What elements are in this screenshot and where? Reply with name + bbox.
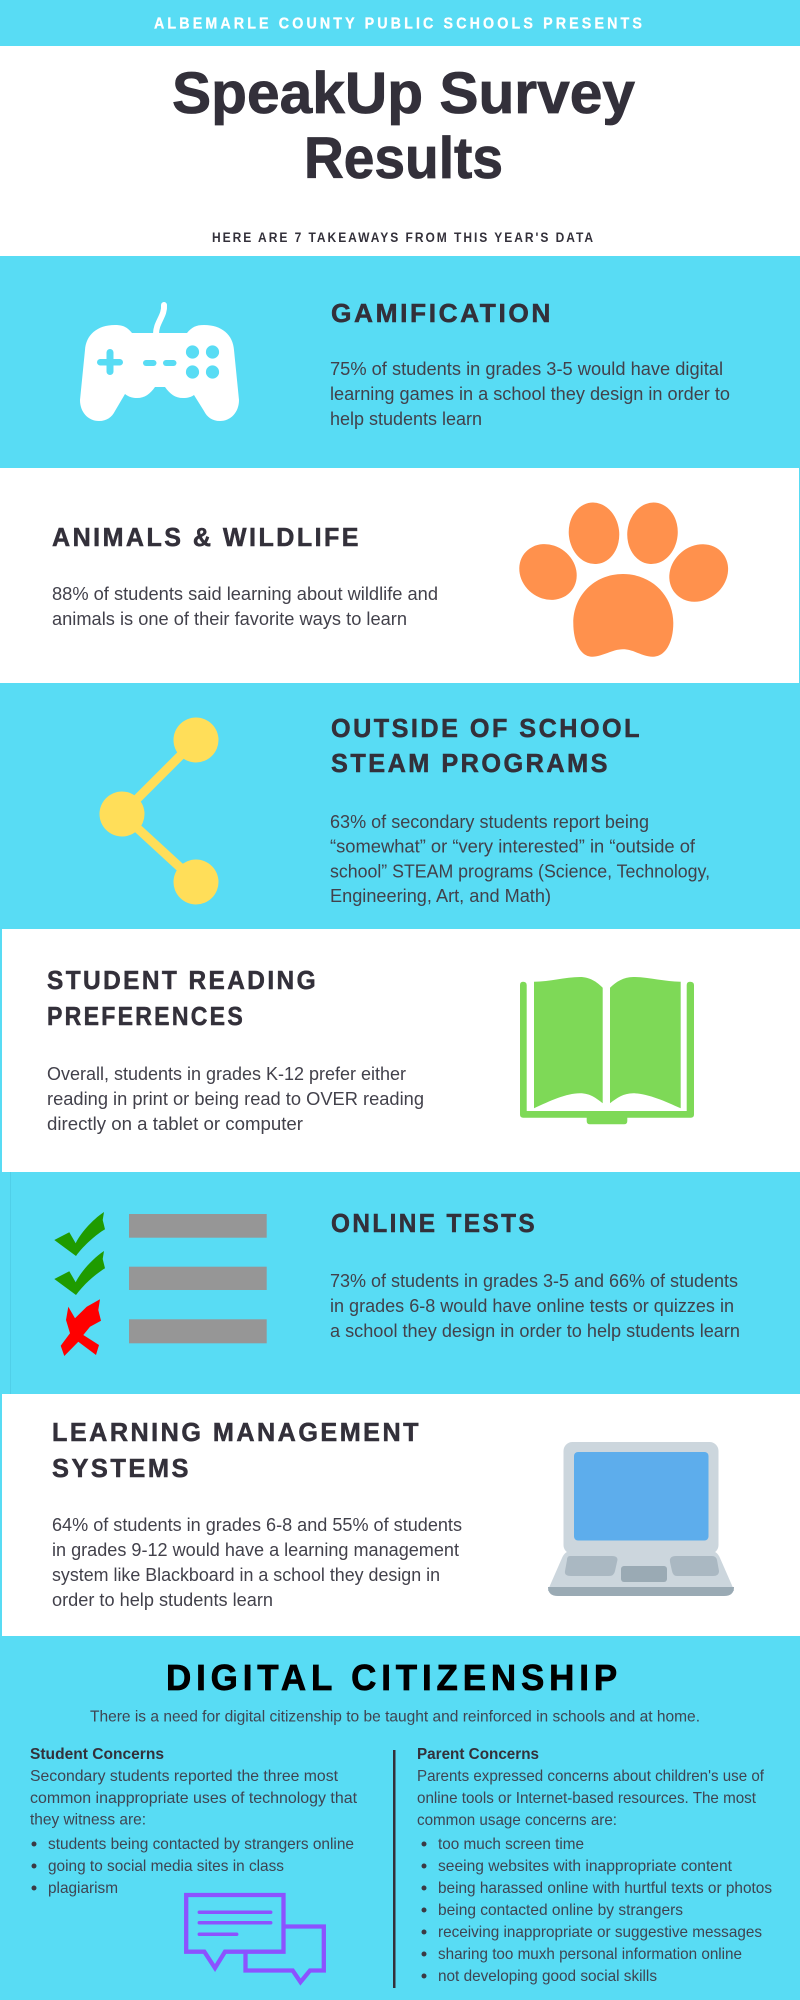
column: parent concerns: sharing too muxh personal information online	[438, 1946, 742, 1963]
column: parent concerns: Parent Concerns	[417, 1746, 539, 1763]
text: gamification body: learning games in a school they design in order to	[330, 384, 730, 404]
heading: LMS: SYSTEMS	[52, 1455, 191, 1483]
column: student concerns	[30, 1746, 358, 1897]
text: reading body: directly on a tablet or computer	[47, 1114, 303, 1134]
icon: laptop	[548, 1442, 734, 1596]
column: parent concerns: receiving inappropriate or suggestive messages	[438, 1924, 762, 1941]
panel: student reading preferences	[0, 929, 800, 1172]
icon: paw print	[508, 500, 740, 657]
column: student concerns: they witness are:	[30, 1812, 146, 1828]
column: student concerns: common inappropriate uses of technology that	[30, 1790, 358, 1807]
heading: gamification: GAMIFICATION	[331, 300, 553, 328]
heading: LMS: LEARNING MANAGEMENT	[52, 1419, 421, 1447]
column: parent concerns: being contacted online by strangers	[438, 1902, 683, 1919]
text: online tests body: 73% of students in grades 3-5 and 66% of students	[330, 1271, 738, 1291]
heading: reading: PREFERENCES	[47, 1003, 245, 1031]
heading: LMS	[52, 1419, 421, 1483]
icon: chat bubbles	[186, 1895, 324, 1982]
column: parent concerns: being harassed online with hurtful texts or photos	[438, 1880, 772, 1897]
title: SpeakUp Survey	[172, 61, 635, 126]
column: student concerns: Secondary students reported the three most	[30, 1768, 339, 1785]
text: LMS body: in grades 9-12 would have a learning management	[52, 1540, 459, 1560]
icon: share nodes	[100, 718, 218, 904]
text: reading body: Overall, students in grades K-12 prefer either	[47, 1064, 406, 1084]
title: Results	[304, 126, 503, 191]
heading: animals: ANIMALS & WILDLIFE	[52, 524, 361, 552]
text: intro sentence: There is a need for digital citizenship to be taught and reinforced in schools and at home.	[90, 1708, 700, 1726]
text: online tests body	[330, 1271, 740, 1341]
text: animals body: animals is one of their favorite ways to learn	[52, 609, 407, 629]
heading: digital citizenship: DIGITAL CITIZENSHIP	[166, 1657, 622, 1698]
column: student concerns: plagiarism	[48, 1880, 118, 1897]
text: LMS body: order to help students learn	[52, 1590, 273, 1610]
icon: checklist	[54, 1212, 267, 1356]
column: parent concerns: Parents expressed concerns about children's use of	[417, 1768, 765, 1785]
text: STEAM body: school” STEAM programs (Science, Technology,	[330, 862, 710, 882]
text: STEAM body: 63% of secondary students report being	[330, 812, 649, 832]
column: student concerns: going to social media sites in class	[48, 1858, 284, 1875]
column: parent concerns: not developing good social skills	[438, 1968, 657, 1985]
text: gamification body: help students learn	[330, 409, 482, 429]
text: LMS body: system like Blackboard in a school they design in	[52, 1565, 440, 1585]
text: STEAM body: Engineering, Art, and Math)	[330, 886, 551, 906]
text: gamification body	[330, 359, 730, 429]
heading: outside of school: OUTSIDE OF SCHOOL	[331, 715, 642, 743]
title	[172, 61, 635, 191]
text: animals body	[52, 584, 438, 629]
column: parent concerns: common usage concerns are:	[417, 1812, 617, 1829]
header band	[0, 0, 800, 46]
text: reading body: reading in print or being read to OVER reading	[47, 1089, 424, 1109]
heading: outside of school	[331, 715, 642, 778]
icon: game controller	[80, 305, 239, 421]
text: online tests body: a school they design in order to help students learn	[330, 1321, 740, 1341]
column: parent concerns	[417, 1746, 772, 1985]
icon: open book	[520, 977, 694, 1124]
text: online tests body: in grades 6-8 would have online tests or quizzes in	[330, 1296, 734, 1316]
heading: online tests: ONLINE TESTS	[331, 1210, 537, 1238]
text: STEAM body	[330, 812, 710, 906]
heading: outside of school: STEAM PROGRAMS	[331, 750, 610, 778]
column: student concerns: Student Concerns	[30, 1746, 164, 1763]
panel: gamification	[0, 256, 800, 468]
panel: digital citizenship	[0, 1636, 800, 2000]
heading: reading	[47, 967, 318, 1031]
panel: outside of school STEAM	[0, 683, 800, 929]
column: parent concerns: online tools or Internet-based resources. The most	[417, 1790, 757, 1807]
column: student concerns: students being contacted by strangers online	[48, 1836, 354, 1853]
panel: animals and wildlife	[0, 468, 800, 683]
text: STEAM body: “somewhat” or “very interested” in “outside of	[330, 836, 696, 856]
text: LMS body: 64% of students in grades 6-8 and 55% of students	[52, 1515, 462, 1535]
presenter line: ALBEMARLE COUNTY PUBLIC SCHOOLS PRESENTS	[154, 16, 645, 32]
text: LMS body	[52, 1515, 462, 1610]
text: gamification body: 75% of students in grades 3-5 would have digital	[330, 359, 723, 379]
heading: reading: STUDENT READING	[47, 967, 318, 995]
subtitle: HERE ARE 7 TAKEAWAYS FROM THIS YEAR'S DATA	[212, 230, 595, 245]
text: animals body: 88% of students said learning about wildlife and	[52, 584, 438, 604]
column: parent concerns: seeing websites with inappropriate content	[438, 1858, 733, 1875]
text: reading body	[47, 1064, 424, 1134]
panel: online tests	[0, 1172, 800, 1394]
panel: learning management systems	[0, 1394, 800, 1636]
column: parent concerns: too much screen time	[438, 1836, 584, 1853]
